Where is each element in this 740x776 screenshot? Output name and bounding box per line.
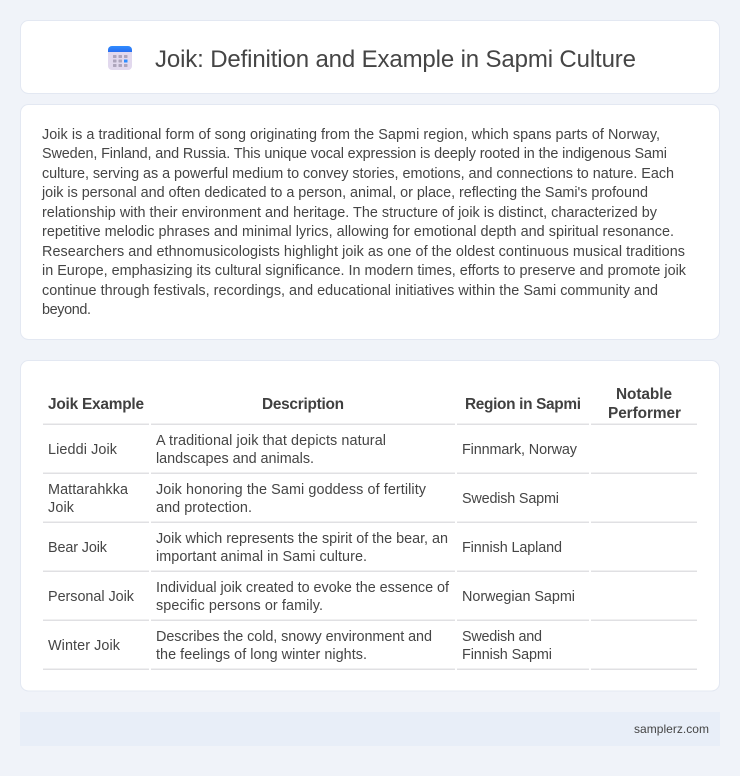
table row: Winter Joik: Finnish Sapmi xyxy=(462,647,552,663)
table row: Winter Joik xyxy=(48,629,552,663)
text block: joik paragraph: repetitive melodic phrases and minimal lyrics, allowing for emotional depth and spiritual resonance. xyxy=(42,224,674,240)
table header row: Description xyxy=(262,396,344,413)
text block: joik paragraph: relationship with their environment and heritage. The structure of joik is distinct, characterized by xyxy=(42,205,658,221)
table row: Lieddi Joik: Lieddi Joik xyxy=(48,442,118,458)
table header row: Region in Sapmi xyxy=(465,396,581,413)
table row: Mattarahkka Joik: Joik honoring the Sami goddess of fertility xyxy=(156,482,427,498)
table row: Bear Joik: Finnish Lapland xyxy=(462,540,562,556)
panel: title header xyxy=(20,20,720,94)
text block: joik paragraph: in Europe, emphasizing its cultural significance. In modern times, efforts to preserve and promote joik xyxy=(42,263,687,279)
table row: Personal Joik: Personal Joik xyxy=(48,589,135,605)
table header row: Notable xyxy=(616,386,672,403)
text block: joik paragraph: Researchers and ethnomusicologists highlight joik as one of the oldest continuous musical traditions xyxy=(42,244,685,260)
text block: joik paragraph: Sweden, Finland, and Russia. This unique vocal expression is deeply rooted in the indigenous Sami xyxy=(42,146,667,162)
text block: joik paragraph: joik is personal and often dedicated to a person, animal, or place, reflecting the Sami's profound xyxy=(41,185,648,201)
text block: joik paragraph: culture, serving as a powerful medium to convey stories, emotions, and connections to nature. Each xyxy=(42,166,674,182)
text block: joik paragraph: beyond. xyxy=(42,302,91,318)
table row: Mattarahkka Joik xyxy=(48,482,559,516)
table row: Personal Joik: Norwegian Sapmi xyxy=(462,589,575,605)
table row: Mattarahkka Joik: Swedish Sapmi xyxy=(462,491,559,507)
table row: Bear Joik: Joik which represents the spirit of the bear, an xyxy=(156,531,448,547)
table row: Bear Joik: Bear Joik xyxy=(48,540,108,556)
panel: description xyxy=(20,104,720,340)
table row: Bear Joik: important animal in Sami culture. xyxy=(156,549,367,565)
title: Joik: Definition and Example in Sapmi Culture xyxy=(155,46,636,73)
table header row: Performer xyxy=(608,405,681,422)
footer credit: samplerz.com xyxy=(634,722,709,736)
table row: Personal Joik xyxy=(48,580,575,614)
table row: Personal Joik: specific persons or family. xyxy=(156,598,323,614)
table row: Winter Joik: Describes the cold, snowy environment and xyxy=(156,629,432,645)
table row: Winter Joik: the feelings of long winter nights. xyxy=(156,647,367,663)
table row: Mattarahkka Joik: and protection. xyxy=(156,500,252,516)
text block: joik paragraph: continue through festivals, recordings, and educational initiatives within the Sami community and xyxy=(42,283,658,299)
table row: Lieddi Joik xyxy=(48,433,578,467)
table row: Bear Joik xyxy=(48,531,562,565)
table row: Mattarahkka Joik: Mattarahkka xyxy=(48,482,128,498)
table row: Lieddi Joik: A traditional joik that depicts natural xyxy=(156,433,386,449)
table header row xyxy=(48,386,681,422)
table row: Lieddi Joik: landscapes and animals. xyxy=(156,451,314,467)
table row: Mattarahkka Joik: Joik xyxy=(48,500,75,516)
text block: joik paragraph xyxy=(41,127,687,318)
table header row: Joik Example xyxy=(48,396,144,413)
footer bar xyxy=(20,712,720,746)
panel: joik examples table xyxy=(20,360,720,691)
text block: joik paragraph: Joik is a traditional form of song originating from the Sapmi region, which spans parts of Norway, xyxy=(42,127,660,143)
table row: Lieddi Joik: Finnmark, Norway xyxy=(462,442,578,458)
icon: calendar xyxy=(108,46,132,70)
table row: Winter Joik: Winter Joik xyxy=(48,638,121,654)
table row: Winter Joik: Swedish and xyxy=(462,629,542,645)
table row: Personal Joik: Individual joik created to evoke the essence of xyxy=(156,580,450,596)
